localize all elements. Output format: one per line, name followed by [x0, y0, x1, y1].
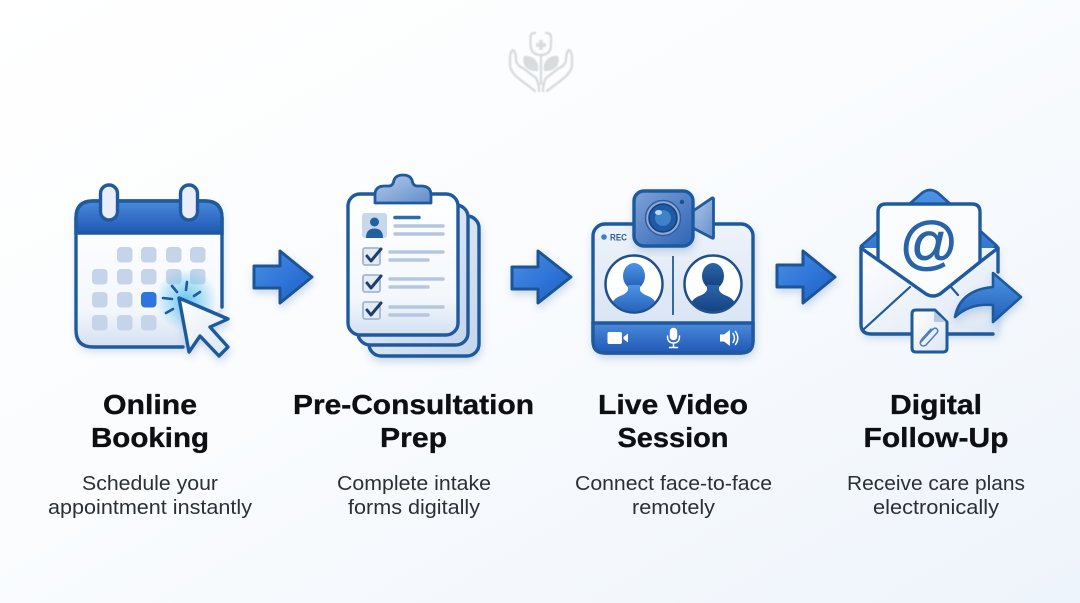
icon: clipboard clip [375, 175, 431, 203]
heading: online booking: Booking [91, 422, 209, 453]
icon: webcam [634, 191, 714, 246]
text: live video description: remotely [632, 496, 716, 519]
recording label: REC [610, 232, 627, 244]
icon: checkboxes [363, 248, 380, 319]
text: digital follow-up description [847, 472, 1025, 519]
step 4: digital follow-up [847, 190, 1025, 519]
icon: attachment document [912, 310, 947, 352]
text: live video description: Connect face-to-face [575, 472, 772, 495]
text: online booking description [48, 472, 253, 519]
text: digital follow-up description: electronically [873, 496, 1000, 519]
participant 1 [606, 256, 662, 314]
heading: digital follow-up [864, 389, 1008, 453]
icon: profile [362, 213, 387, 238]
heading: live video session: Live Video [598, 389, 748, 420]
heading: pre-consultation prep: Prep [380, 422, 447, 453]
icon: camera control [608, 332, 628, 344]
icon: reply arrow [955, 273, 1021, 322]
heading: online booking [91, 389, 209, 453]
heading: digital follow-up: Follow-Up [864, 422, 1008, 453]
arrow 2 [512, 251, 571, 303]
heading: online booking: Online [103, 389, 197, 420]
step 1: online booking [48, 185, 253, 519]
heading: digital follow-up: Digital [890, 389, 982, 420]
icon: cursor [179, 298, 228, 356]
heading: live video session: Session [618, 422, 728, 453]
logo: hands with plant and medical cross [510, 33, 572, 91]
icon: video call window [593, 191, 753, 353]
step 3: live video session [575, 191, 772, 519]
arrow 1 [254, 251, 312, 303]
step 2: pre-consultation prep [293, 175, 534, 519]
participant 2 [684, 256, 742, 314]
text: pre-consultation description: Complete intake [337, 472, 491, 495]
icon: speaker control [720, 330, 738, 346]
text: digital follow-up description: Receive care plans [847, 472, 1025, 495]
text: online booking description: Schedule your [82, 472, 218, 495]
icon: click sparks [163, 282, 200, 313]
icon: clipboard with stacked forms [348, 175, 479, 356]
text: pre-consultation description [337, 472, 491, 519]
icon: envelope [861, 190, 1021, 352]
arrow 3 [777, 251, 835, 303]
text: online booking description: appointment instantly [48, 496, 253, 519]
icon: microphone control [668, 328, 680, 348]
text: live video description [575, 472, 772, 519]
heading: pre-consultation prep [293, 389, 534, 453]
text: pre-consultation description: forms digitally [348, 496, 481, 519]
icon: calendar [76, 185, 228, 356]
heading: live video session [598, 389, 748, 453]
heading: pre-consultation prep: Pre-Consultation [293, 389, 534, 420]
at sign: @ [900, 211, 958, 276]
recording label [601, 232, 627, 244]
